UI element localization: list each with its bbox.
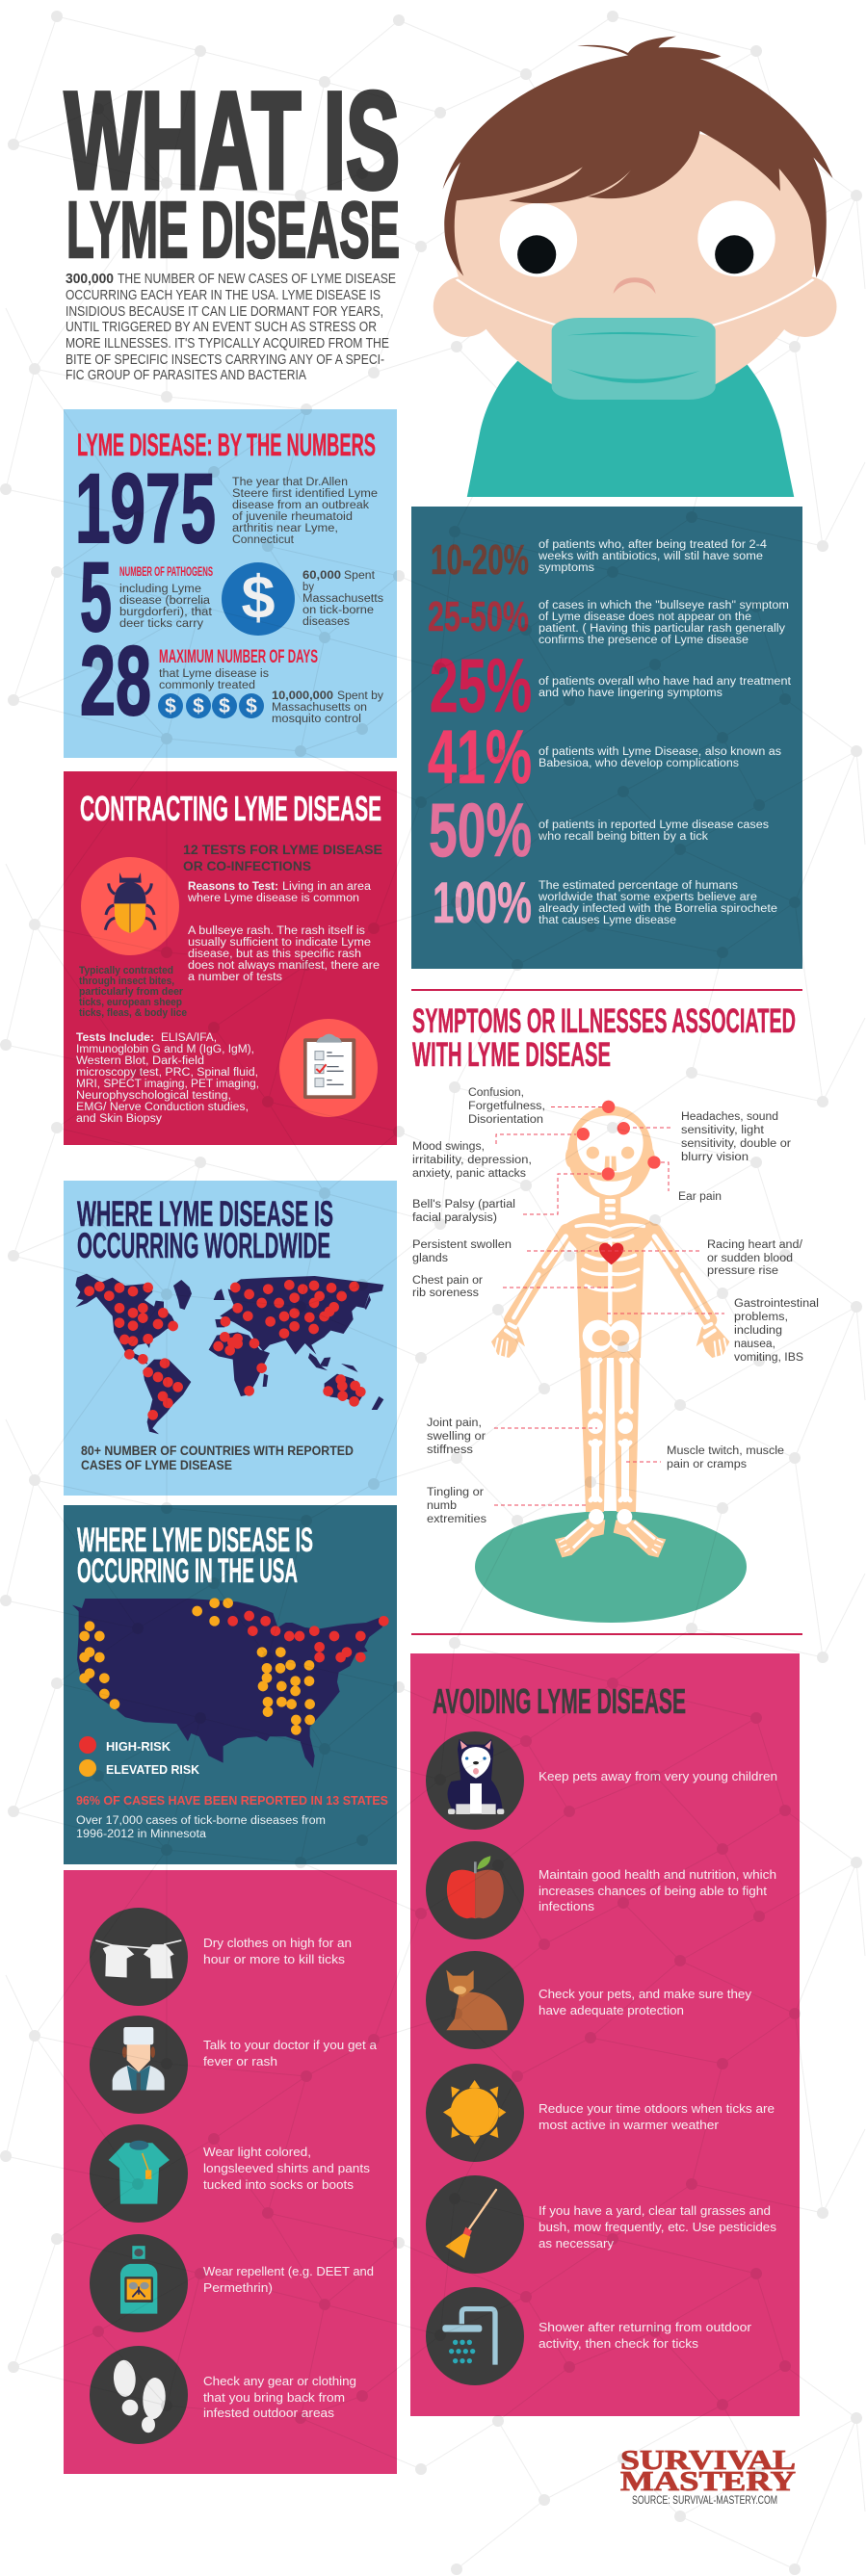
stat: 1975: The year that Dr.Allen [232,477,348,488]
subheading: 12 tests [183,843,382,873]
tip: repellent [90,2234,374,2332]
symptom labels: extremities [427,1514,486,1525]
tip: check your pets [426,1951,752,2049]
stat: 50%: of patients in reported Lyme disease cases [539,820,769,831]
heading: symptoms [412,1002,796,1074]
tip: check gear: infested outdoor areas [203,2406,335,2420]
tip: light clothes [90,2124,371,2223]
stat: 10,000,000 spent: mosquito control [272,714,361,725]
tip: clear tall grasses: as necessary [539,2236,615,2251]
symptom labels: Muscle twitch, muscle [667,1445,784,1457]
text: tests include: and Skin Biopsy [76,1113,162,1125]
stat: 25%: of patients overall who have had any treatment [539,676,792,688]
text: typically contracted: ticks, fleas, & body lice [79,1007,187,1019]
text: bullseye rash: A bullseye rash. The rash itself is [188,925,365,937]
heading: worldwide: WHERE LYME DISEASE IS [77,1194,333,1234]
stat: 41%: of patients with Lyme Disease, also known as [539,746,781,758]
intro text block: THE NUMBER OF NEW CASES OF LYME DISEASE [118,272,396,287]
tip: keep pets away: Keep pets away from very young children [539,1769,777,1783]
stat: 50%: 50% [429,787,532,872]
USA map with risk dots [72,1599,385,1768]
tip: check gear: that you bring back from [203,2390,345,2405]
stat: 25%: 25% [430,642,532,728]
text: 96% of cases: 96% OF CASES HAVE BEEN REPORTED IN 13 STATES [76,1793,388,1808]
text: bullseye rash [188,925,380,983]
tip: repellent: Permethrin) [203,2280,273,2295]
legend: HIGH-RISK [106,1739,171,1754]
tip: shower [426,2287,752,2385]
symptom labels: facial paralysis) [412,1212,497,1224]
icon: four dollar coins: $ [165,695,176,717]
panel: by the numbers [64,409,397,758]
icon: dollar coin [222,562,295,636]
tip: health and nutrition: increases chances of being able to fight [539,1884,767,1898]
symptom labels: stiffness [427,1444,473,1456]
stat: 10-20%: symptoms [539,562,594,574]
stat: 100%: that causes Lyme disease [539,915,676,926]
stat: 5 pathogens: disease (borrelia [119,595,211,607]
ground ellipse [475,1511,747,1623]
heading: USA [77,1522,313,1590]
symptom labels: sensitivity, double or [681,1138,791,1150]
symptom labels: Bell's Palsy (partial [412,1199,515,1210]
symptom labels [412,1087,819,1525]
stat: 28 days: 28 [80,626,151,736]
tip: check your pets: Check your pets, and make sure they [539,1987,752,2001]
skeleton figure [491,1106,729,1557]
stat: 25-50% [428,593,789,646]
stat: 10,000,000 spent: Spent by [337,690,383,702]
stat: 25-50%: confirms the presence of Lyme disease [539,635,749,646]
text: tests include: ELISA/IFA, [161,1032,217,1044]
stat: 25-50%: of cases in which the "bullseye rash" symptom [539,600,789,611]
stat: 60,000 spent [302,570,383,628]
tip: dry clothes: Dry clothes on high for an [203,1936,352,1950]
icon: beetle [81,857,179,955]
stat: 60,000 spent: on tick-borne [302,605,374,616]
stat: 1975: 1975 [75,454,216,563]
logo: Survival Mastery: MASTERY [620,2466,796,2497]
legend: ELEVATED RISK [106,1762,200,1777]
tip: light clothes: Wear light colored, [203,2145,311,2159]
icon: dollar coin: $ [241,564,276,632]
stat: 10,000,000 spent [272,690,383,725]
stat: 60,000 spent: by [302,582,314,593]
tip: clear tall grasses [426,2175,777,2274]
stat: 41%: 41% [428,714,532,799]
title: What is Lyme Disease: WHAT IS [65,65,400,218]
stat: 1975: of juvenile rheumatoid [232,511,353,523]
tip: light clothes: tucked into socks or boots [203,2177,355,2192]
text: typically contracted: ticks, european sheep [79,997,182,1008]
text: bullseye rash: usually sufficient to indicate Lyme [188,937,371,949]
stat: 5 pathogens: NUMBER OF PATHOGENS [119,564,213,579]
symptom labels: numb [427,1500,457,1512]
symptom labels: Ear pain [678,1191,722,1203]
text: typically contracted [79,965,187,1019]
symptom labels: vomiting, IBS [734,1352,803,1364]
stat: 25-50%: 25-50% [428,593,529,640]
symptom labels: or sudden blood [707,1253,793,1264]
text: tests include: Neurophyschological testing, [76,1090,231,1102]
text: typically contracted: through insect bites, [79,976,174,987]
text: bullseye rash: a number of tests [188,972,282,983]
icon: clipboard [279,1019,378,1117]
tip: check gear [90,2346,356,2444]
symptom labels: sensitivity, light [681,1125,765,1136]
text: tests include: Tests Include: [76,1032,154,1044]
heading: worldwide [77,1194,333,1265]
text: bullseye rash: does not always manifest, there are [188,960,380,972]
icon: heart [599,1243,623,1264]
symptom labels: pressure rise [707,1265,778,1277]
tip: keep pets away [426,1731,777,1830]
stat: 1975: arthritis near Lyme, [232,523,338,534]
symptom labels: pain or cramps [667,1459,747,1470]
tip: shower: Shower after returning from outdoor [539,2320,752,2334]
stat: 60,000 spent: Massachusetts [302,593,383,605]
symptom labels: Disorientation [468,1114,543,1126]
stat: 60,000 spent: 60,000 [302,570,341,582]
text: bullseye rash: disease, but as this specific rash [188,949,361,960]
text: tests include: microscopy test, PRC, Spinal fluid, [76,1067,258,1079]
subheading: 12 tests: 12 TESTS FOR LYME DISEASE [183,843,382,857]
stat: 100%: already infected with the Borrelia spirochete [539,903,777,915]
icon: four dollar coins: $ [193,695,204,717]
illustration: boy with mask [434,37,836,497]
stat: 28 days: MAXIMUM NUMBER OF DAYS [159,647,318,667]
stat: 10,000,000 spent: 10,000,000 [272,690,333,702]
tip: warmer weather: Reduce your time otdoors when ticks are [539,2101,775,2116]
tip: light clothes: longsleeved shirts and pants [203,2161,371,2175]
symptom labels: problems, [734,1312,788,1323]
text: tests include: MRI, SPECT imaging, PET imaging, [76,1079,259,1090]
tip: health and nutrition: infections [539,1899,595,1913]
source line: SOURCE: SURVIVAL-MASTERY.COM [632,2493,777,2507]
panel: USA [64,1505,397,1864]
stat: 100%: The estimated percentage of humans [539,880,738,892]
symptom labels: Joint pain, [427,1418,482,1429]
icon: four dollar coins [158,693,264,718]
logo: Survival Mastery: SURVIVAL [620,2445,796,2476]
heading: contracting: CONTRACTING LYME DISEASE [80,789,381,828]
stat: 41%: Babesioa, who develop complications [539,758,739,769]
stat: 1975: Steere first identified Lyme [232,488,378,500]
text: typically contracted: particularly from deer [79,986,184,998]
text: 80+ countries: 80+ NUMBER OF COUNTRIES WITH REPORTED [81,1444,354,1458]
symptom labels: Tingling or [427,1487,484,1498]
text: Minnesota: 1996-2012 in Minnesota [76,1829,207,1840]
panel: contracting Lyme disease [64,771,397,1145]
stat: 5 pathogens: burgdorferi), that [119,607,213,618]
intro text block: 300,000 [66,272,114,287]
panel: worldwide [64,1181,397,1496]
symptom markers and leader lines [494,1101,724,1505]
tip: check gear: Check any gear or clothing [203,2374,356,2388]
text: reasons to test: where Lyme disease is common [187,893,359,904]
legend [79,1736,200,1777]
intro text block: BITE OF SPECIFIC INSECTS CARRYING ANY OF A SPECI- [66,352,384,368]
tip: shower: activity, then check for ticks [539,2336,699,2351]
stat: 50% [429,787,769,872]
stat: 1975: disease from an outbreak [232,500,369,511]
tip: talk to doctor: fever or rash [203,2054,277,2069]
stat: 60,000 spent: Spent [344,570,376,582]
symptom labels: blurry vision [681,1152,749,1163]
stat: 10-20%: 10-20% [431,536,529,584]
symptom labels: Headaches, sound [681,1111,778,1123]
icon: four dollar coins: $ [246,695,257,717]
intro text block: INSIDIOUS BECAUSE IT CAN LIE DORMANT FOR YEARS, [66,304,383,320]
stat: 60,000 spent: diseases [302,616,350,628]
text: typically contracted: Typically contracted [79,965,173,976]
tip: warmer weather [426,2064,775,2162]
text: tests include: EMG/ Nerve Conduction studies, [76,1102,249,1113]
symptom labels: Forgetfulness, [468,1101,545,1112]
world map with dots [75,1274,383,1434]
tip: clear tall grasses: If you have a yard, clear tall grasses and [539,2203,771,2218]
stat: 100% [433,871,777,935]
text: reasons to test: Reasons to Test: [188,881,278,893]
symptom labels: including [734,1325,782,1337]
symptom labels: glands [412,1253,448,1264]
stat: 10,000,000 spent: Massachusetts on [272,702,367,714]
symptom labels: Chest pain or [412,1275,483,1287]
text: tests include [76,1032,259,1125]
subheading: 12 tests: OR CO-INFECTIONS [183,859,311,873]
tip: talk to doctor: Talk to your doctor if you get a [203,2038,378,2052]
stat: 25%: and who have lingering symptoms [539,688,722,699]
text: reasons to test [187,881,372,904]
tip: health and nutrition: Maintain good health and nutrition, which [539,1867,776,1882]
stat: 41% [428,714,781,799]
panel: statistics [411,507,802,969]
symptom labels: Persistent swollen [412,1239,512,1251]
stat: 5 pathogens [80,542,213,652]
title: What is Lyme Disease [65,65,400,274]
stat: 5 pathogens: deer ticks carry [119,618,203,630]
stat: 25-50%: patient. ( Having this particular rash generally [539,623,785,635]
intro text block [66,272,396,383]
tip: repellent: Wear repellent (e.g. DEET and [203,2264,374,2278]
stat: 25% [430,642,792,728]
symptom labels: Racing heart and/ [707,1239,803,1251]
stat: 50%: who recall being bitten by a tick [538,831,708,843]
stat: 5 pathogens: including Lyme [119,584,201,595]
heading: USA: OCCURRING IN THE USA [77,1552,298,1590]
symptom labels: rib soreness [412,1288,479,1299]
symptom labels: nausea, [734,1339,775,1350]
heading: avoiding: AVOIDING LYME DISEASE [433,1681,686,1721]
stat: 28 days: that Lyme disease is [159,668,269,680]
stat: 25-50%: of Lyme disease does not appear on the [539,611,751,623]
panel: prevention tips [64,1870,397,2474]
symptom labels: Mood swings, [412,1141,485,1153]
logo: Survival Mastery [620,2445,796,2497]
symptom labels: Gastrointestinal [734,1298,819,1310]
heading: worldwide: OCCURRING WORLDWIDE [77,1226,330,1265]
text: reasons to test: Living in an area [282,881,372,893]
symptom labels: irritability, depression, [412,1155,532,1166]
intro text block: FIC GROUP OF PARASITES AND BACTERIA [66,368,306,383]
heading: by the numbers: LYME DISEASE: BY THE NUMBERS [77,428,376,462]
stat: 1975: Connecticut [232,534,295,546]
stat: 100%: worldwide that some experts believe are [538,892,757,903]
tip: check your pets: have adequate protection [539,2003,684,2017]
stat: 100%: 100% [433,871,532,935]
stat: 28 days: commonly treated [159,680,255,691]
tip: dry clothes: hour or more to kill ticks [203,1952,346,1966]
text: tests include: Western Blot, Dark-field [76,1055,204,1067]
intro text block: UNTIL TRIGGERED BY AN EVENT SUCH AS STRESS OR [66,320,377,335]
panel: avoiding Lyme disease [410,1653,800,2416]
title: What is Lyme Disease: LYME DISEASE [66,185,400,274]
tip: clear tall grasses: bush, mow frequently, etc. Use pesticides [539,2220,777,2234]
symptom labels: anxiety, panic attacks [412,1168,526,1180]
heading: symptoms: WITH LYME DISEASE [412,1036,611,1074]
symptom labels: swelling or [427,1431,486,1443]
text: 80+ countries: CASES OF LYME DISEASE [81,1458,232,1472]
icon: four dollar coins: $ [219,695,230,717]
text: Minnesota: Over 17,000 cases of tick-borne diseases from [76,1815,326,1827]
text: tests include: Immunoglobin G and M (IgG, IgM), [76,1044,254,1055]
heading: USA: WHERE LYME DISEASE IS [77,1522,313,1559]
tip: health and nutrition [426,1841,776,1939]
intro text block: OCCURRING EACH YEAR IN THE USA. LYME DISEASE IS [66,288,381,303]
intro text block: MORE ILLNESSES. IT'S TYPICALLY ACQUIRED FROM THE [66,336,389,351]
stat: 10-20% [431,536,768,584]
stat: 28 days [80,626,318,736]
stat: 10-20%: weeks with antibiotics, will stil have some [538,551,763,562]
tip: dry clothes [90,1908,352,2006]
tip: warmer weather: most active in warmer weather [539,2118,720,2132]
symptom labels: Confusion, [468,1087,524,1099]
stat: 5 pathogens: 5 [80,542,112,652]
stat: 10-20%: of patients who, after being treated for 2-4 [539,539,768,551]
text: Minnesota [76,1815,326,1840]
text: 80+ countries [81,1444,354,1472]
tip: talk to doctor [90,2016,378,2114]
